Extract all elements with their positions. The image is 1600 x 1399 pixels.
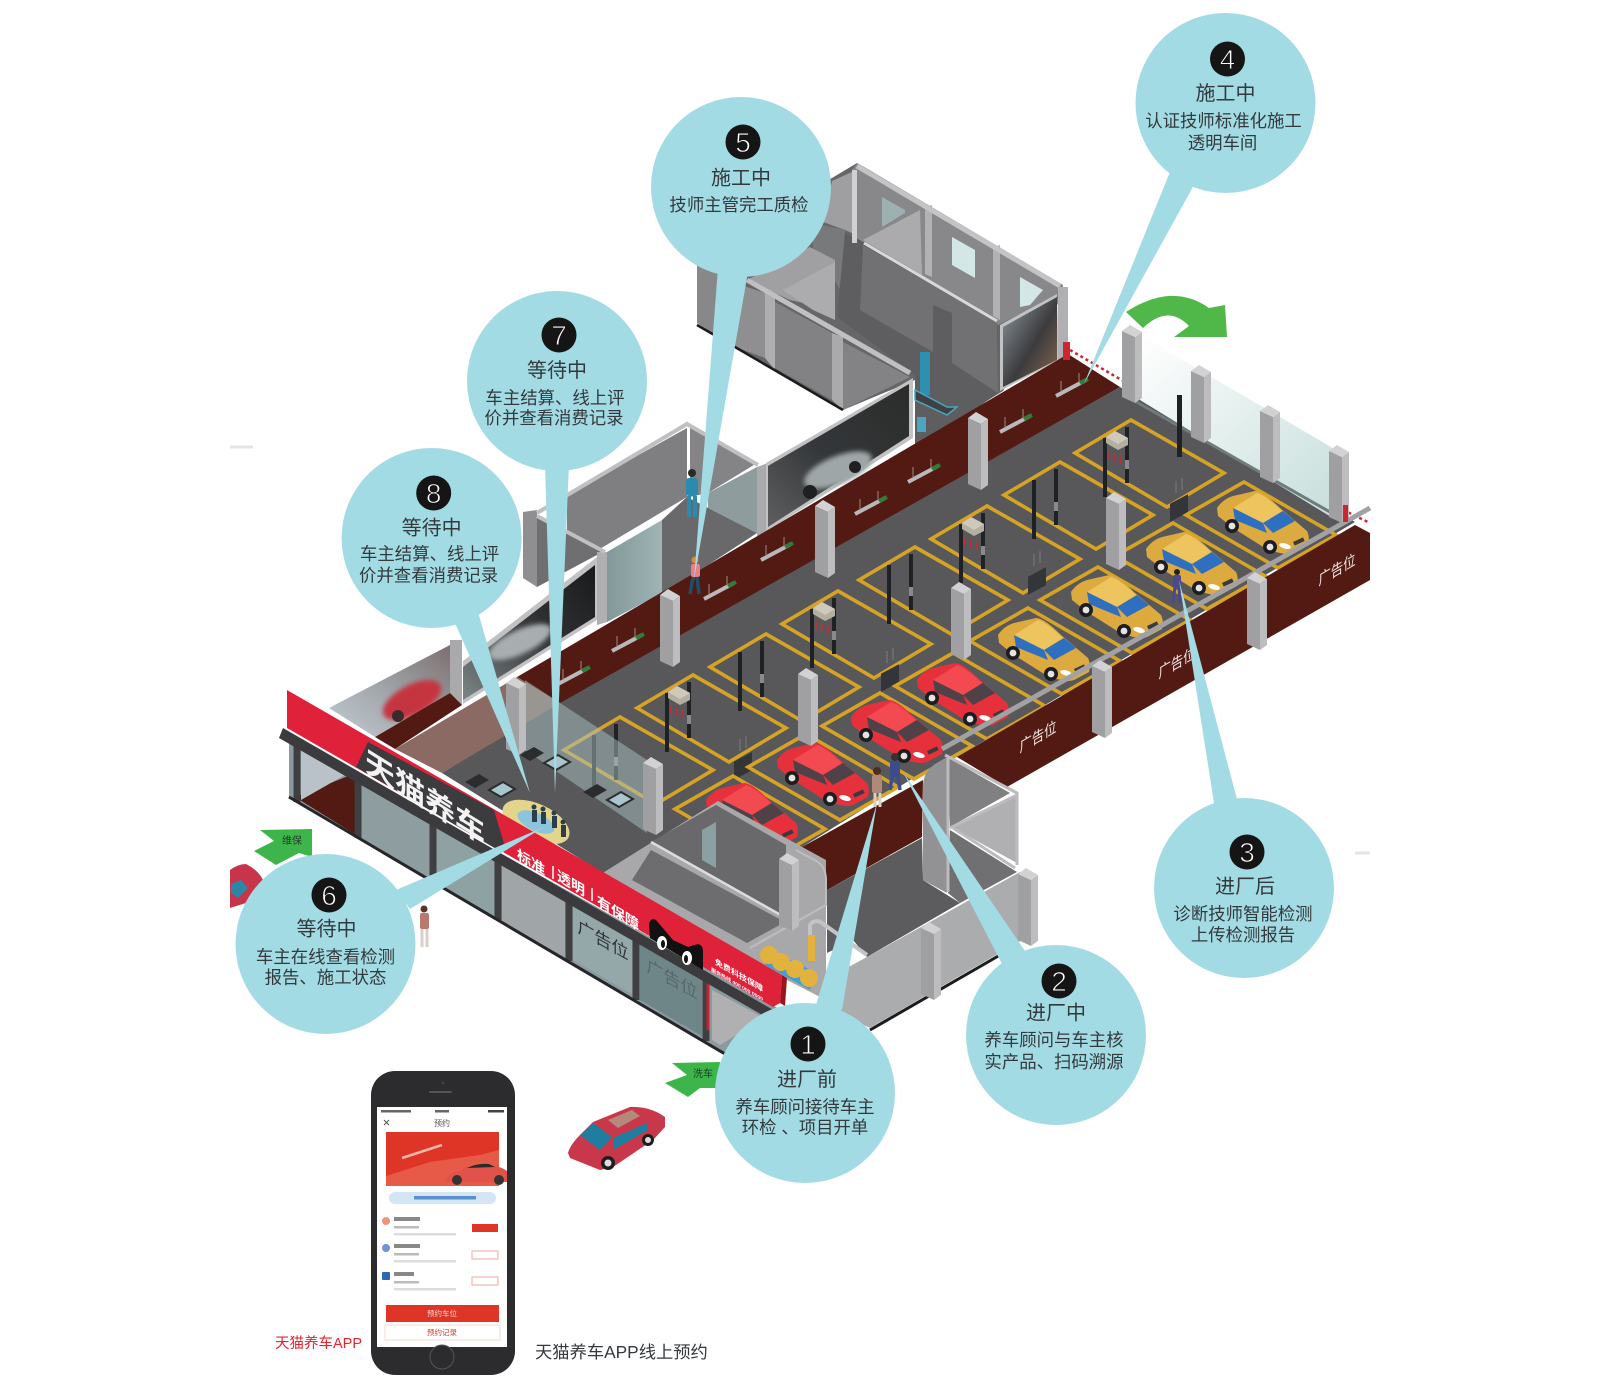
reception table bbox=[496, 790, 576, 854]
phone: service list bbox=[382, 1217, 498, 1290]
sign: slogan bbox=[517, 847, 639, 934]
billboard: dusk car bbox=[1000, 287, 1068, 391]
person: navy advisor bbox=[1173, 569, 1181, 603]
callout 1: 进厂前 bbox=[777, 1068, 837, 1091]
callout 5: 5 bbox=[735, 127, 751, 158]
car: clipped red at left edge bbox=[230, 864, 263, 908]
phone: status and title bbox=[381, 1110, 504, 1128]
phone: buttons: 预约车位 bbox=[427, 1308, 457, 1318]
callout 7: 车主结算、线上评 bbox=[485, 388, 625, 408]
callout 1 bbox=[715, 803, 895, 1183]
callout 3: 3 bbox=[1239, 837, 1255, 868]
callout 6: 报告、施工状态 bbox=[265, 968, 386, 988]
callout 7: 等待中 bbox=[527, 359, 587, 382]
car: red sedan entering bbox=[568, 1107, 665, 1170]
left opening bbox=[295, 773, 356, 835]
people bbox=[420, 469, 1181, 947]
interior glass partition bbox=[525, 680, 647, 833]
callout 4: 施工中 bbox=[1196, 82, 1256, 105]
callout 7 bbox=[467, 291, 647, 793]
phone: status and title: 预约 bbox=[434, 1118, 450, 1128]
callout 5: 施工中 bbox=[711, 166, 771, 190]
red dotted barrier bbox=[1070, 350, 1370, 523]
callout 1: 环检 、项目开单 bbox=[742, 1118, 868, 1138]
shopfront bbox=[289, 735, 781, 1087]
callout 4: 4 bbox=[1220, 44, 1235, 75]
callout 8: 8 bbox=[426, 478, 441, 509]
ad slot text: 广告位 bbox=[1019, 718, 1057, 757]
person: navy service bbox=[890, 753, 900, 790]
green arrow: car wash bbox=[665, 1062, 720, 1097]
callout 8: 车主结算、线上评 bbox=[360, 544, 499, 564]
billboard: dark car bbox=[463, 557, 597, 704]
ad slot text: 广告位 bbox=[1158, 644, 1196, 683]
sign: slogan: 标准 bbox=[517, 847, 545, 879]
callout 7: 7 bbox=[551, 320, 567, 351]
callout 1: 养车顾问接待车主 bbox=[735, 1097, 875, 1117]
workshop floor bbox=[442, 387, 1355, 873]
back wall: maroon bbox=[395, 342, 1370, 773]
person: brown coat bbox=[872, 767, 882, 807]
red signboard bbox=[279, 690, 787, 1020]
ad slot text: 广告位 bbox=[1318, 551, 1356, 590]
callout 5: 技师主管完工质检 bbox=[669, 195, 809, 215]
back room: workshop annex bbox=[697, 163, 1063, 445]
callout 6: 等待中 bbox=[296, 918, 356, 940]
shopfront: 广告位 bbox=[647, 955, 697, 1003]
inspection bays: yellow outlines bbox=[564, 395, 1224, 804]
phone: banner bbox=[386, 1132, 507, 1186]
green arrow: maintenance: 维保 bbox=[282, 834, 302, 847]
parking bays: yellow outlines bbox=[675, 482, 1336, 862]
sign: small service text: 免费科技保障 bbox=[715, 956, 763, 994]
callout 4: 透明车间 bbox=[1188, 133, 1257, 153]
callout 6: 车主在线查看检测 bbox=[256, 947, 395, 967]
people at table bbox=[532, 804, 572, 874]
phone: notice pill bbox=[389, 1192, 496, 1204]
callout 2: 实产品、扫码溯源 bbox=[984, 1052, 1124, 1072]
callout 3 bbox=[1154, 580, 1334, 978]
glass wall: right bbox=[1133, 335, 1336, 520]
person: pink top bbox=[690, 556, 700, 594]
callout 8 bbox=[342, 448, 530, 793]
phone: buttons bbox=[385, 1305, 500, 1340]
panel ad text: 广告位 bbox=[578, 916, 628, 964]
callout 5 bbox=[651, 97, 831, 580]
cars: yellow row bbox=[998, 491, 1309, 681]
callout 6 bbox=[236, 827, 544, 1034]
stray marks bbox=[230, 447, 1370, 853]
lower right room bbox=[802, 755, 1038, 1030]
callout 2: 2 bbox=[1051, 966, 1067, 997]
sign: slogan: 透明 bbox=[557, 868, 585, 900]
person: technician blue bbox=[686, 469, 698, 517]
pillars bbox=[506, 325, 1349, 835]
waiting lounge furniture bbox=[465, 747, 633, 874]
callout 7: 价并查看消费记录 bbox=[484, 408, 624, 428]
sign: slogan: 有保障 bbox=[597, 893, 639, 934]
phone: buttons: 预约记录 bbox=[427, 1327, 457, 1337]
icon: blue lift column bbox=[915, 352, 957, 432]
callout 4 bbox=[1084, 13, 1316, 384]
cars: red row bbox=[706, 663, 1009, 846]
callout 6: 6 bbox=[321, 880, 337, 911]
callout 2 bbox=[903, 772, 1146, 1125]
callout 8: 价并查看消费记录 bbox=[359, 566, 498, 586]
callout 4: 认证技师标准化施工 bbox=[1145, 111, 1302, 131]
green arrow: car wash: 洗车 bbox=[693, 1067, 713, 1080]
billboard: silver car bbox=[766, 378, 913, 532]
green arrow: maintenance bbox=[254, 829, 312, 865]
front wall: maroon with ad slots bbox=[942, 505, 1370, 787]
icon: wash equipment bbox=[760, 921, 867, 990]
billboard: red car bbox=[329, 640, 462, 749]
phone caption: 天猫养车APP线上预约 bbox=[535, 1342, 708, 1362]
callout 8: 等待中 bbox=[402, 516, 462, 540]
person: owner on phone bbox=[420, 906, 429, 947]
icon: cat logo bbox=[649, 919, 703, 970]
callout 1: 1 bbox=[800, 1029, 816, 1060]
sign: brand name: 天猫养车 bbox=[365, 743, 485, 852]
callout 3: 上传检测报告 bbox=[1191, 925, 1295, 945]
glass panels bbox=[362, 780, 429, 878]
callout 2: 进厂中 bbox=[1026, 1002, 1086, 1024]
sign: small service text: 服务热线 400 000 0000 bbox=[711, 965, 763, 1003]
waiting room walls bbox=[523, 424, 768, 625]
green arrow: exit bbox=[1126, 296, 1227, 337]
callout 3: 诊断技师智能检测 bbox=[1173, 904, 1313, 924]
sign: black brand band bbox=[356, 742, 505, 850]
callout 2: 养车顾问与车主核 bbox=[984, 1030, 1124, 1050]
small office room bbox=[603, 801, 867, 1000]
callout 3: 进厂后 bbox=[1215, 875, 1275, 898]
ad slot text bbox=[1019, 551, 1356, 757]
app label: 天猫养车APP bbox=[275, 1335, 362, 1352]
phone mockup bbox=[371, 1071, 515, 1375]
